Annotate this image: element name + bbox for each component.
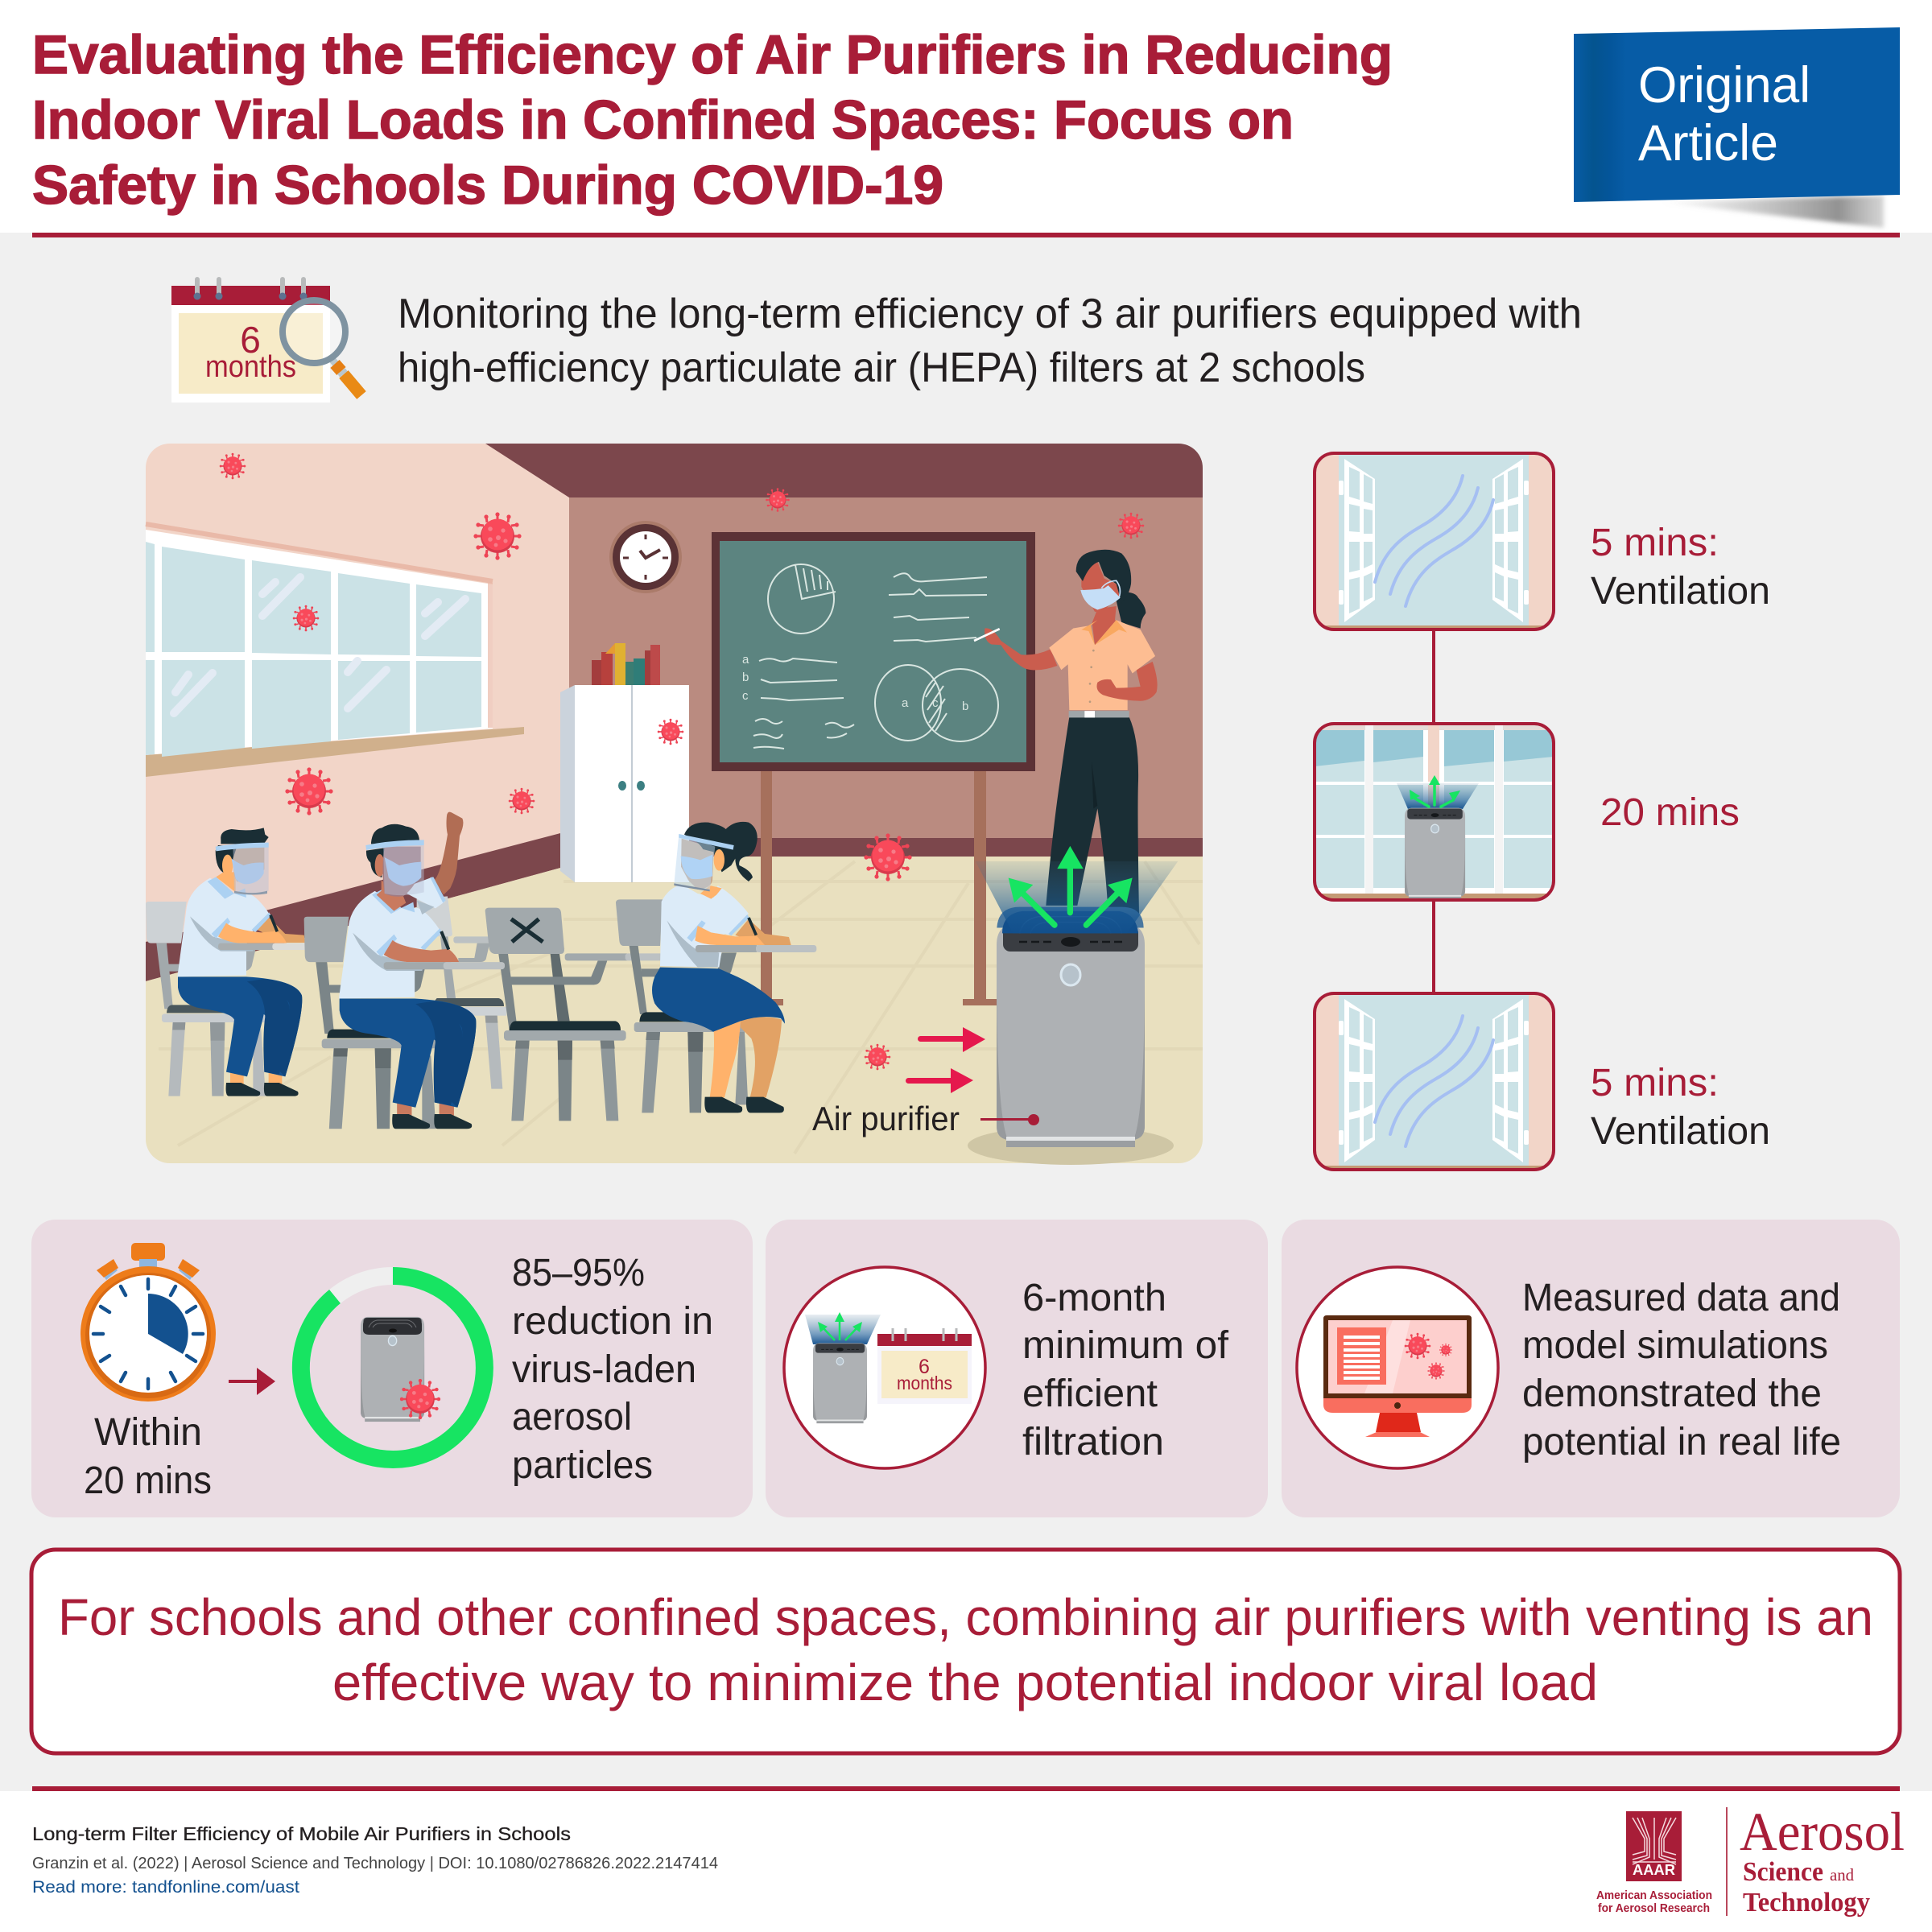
chalkboard: a <box>902 696 909 710</box>
simulations text: model simulations <box>1522 1324 1828 1367</box>
simulations text: demonstrated the <box>1522 1373 1822 1415</box>
calendar and magnifier icon: 6 <box>240 319 261 361</box>
footer band <box>0 1791 1932 1932</box>
within 20 mins text: Within <box>94 1411 202 1454</box>
logo: AAAR: American Association <box>1596 1889 1712 1902</box>
step 3 label: 5 mins: <box>1591 1062 1719 1104</box>
logo: Aerosol Science and Technology: Science <box>1743 1857 1823 1887</box>
logo: Aerosol Science and Technology: and <box>1830 1865 1854 1885</box>
simulations text: potential in real life <box>1522 1421 1841 1463</box>
clock <box>609 521 682 593</box>
reduction text: aerosol <box>512 1396 632 1439</box>
floor <box>146 857 1203 1163</box>
icon: stopwatch <box>80 1243 216 1402</box>
intro text <box>398 291 1582 391</box>
calendar and magnifier icon <box>171 279 361 402</box>
left wall <box>146 444 572 1023</box>
label: air purifier: Air purifier <box>812 1100 960 1137</box>
arrow <box>229 1368 275 1395</box>
reduction text: particles <box>512 1444 653 1487</box>
simulations text: Measured data and <box>1522 1277 1840 1319</box>
logo: AAAR <box>1596 1811 1712 1915</box>
logo: Aerosol Science and Technology: Technology <box>1743 1888 1870 1918</box>
student 2 with raised hand <box>304 812 505 1129</box>
reduction text <box>512 1252 713 1487</box>
step 2 label: 20 mins <box>1600 791 1740 834</box>
step 3 label: Ventilation <box>1591 1110 1770 1153</box>
filtration text: efficient <box>1022 1373 1158 1415</box>
filtration text <box>1022 1277 1229 1463</box>
badge: original article: Article <box>1638 115 1778 171</box>
back wall <box>569 497 1203 860</box>
student 3 in skirt <box>616 822 816 1113</box>
citation: Read more: tandfonline.com/uast <box>32 1878 299 1897</box>
empty chair <box>485 908 686 1121</box>
icon: purifier and calendar <box>784 1267 985 1468</box>
donut chart with purifier <box>301 1276 485 1459</box>
logo: AAAR: for Aerosol Research <box>1598 1901 1710 1915</box>
air purifier with airflow <box>968 846 1178 1165</box>
chalkboard: c <box>932 696 939 710</box>
badge: original article <box>1574 27 1900 228</box>
logo: Aerosol Science and Technology: Aerosol <box>1740 1801 1905 1862</box>
label: air purifier <box>812 1100 1039 1137</box>
title: Evaluating the Efficiency of Air Purifiers in Reducing <box>32 24 1393 85</box>
filtration text: filtration <box>1022 1421 1164 1463</box>
skirting <box>689 838 1203 857</box>
step 1 label: Ventilation <box>1591 570 1770 613</box>
back chair behind student 2 <box>417 896 506 1089</box>
intro text: high-efficiency particulate air (HEPA) filters at 2 schools <box>398 345 1365 391</box>
step 1 label: 5 mins: <box>1591 522 1719 564</box>
connector lines between window steps <box>1432 631 1435 992</box>
citation: Long-term Filter Efficiency of Mobile Air Purifiers in Schools <box>32 1823 571 1844</box>
header band <box>0 0 1932 233</box>
title: Safety in Schools During COVID-19 <box>32 155 943 216</box>
chalkboard <box>712 532 1035 1005</box>
panel: six month filtration <box>766 1220 1268 1517</box>
cabinet and books <box>560 643 689 882</box>
ceiling <box>485 444 1203 497</box>
icon: purifier and calendar: months <box>897 1373 952 1393</box>
within 20 mins text <box>84 1411 212 1502</box>
logo: Aerosol Science and Technology <box>1740 1801 1905 1918</box>
simulations text <box>1522 1277 1841 1463</box>
badge: original article: Original <box>1638 57 1810 114</box>
student 1 with chair <box>146 828 328 1096</box>
window <box>146 524 524 777</box>
title: Indoor Viral Loads in Confined Spaces: Focus on <box>32 89 1294 151</box>
icon: purifier and calendar: 6 <box>919 1356 930 1378</box>
viruses in the classroom <box>220 453 1144 1070</box>
panel: measured data and simulations <box>1282 1220 1900 1517</box>
step 2: closed window with purifier <box>1315 724 1554 900</box>
step 3: open window <box>1315 993 1554 1170</box>
panel: classroom illustration <box>146 444 1203 1165</box>
within 20 mins text: 20 mins <box>84 1459 212 1502</box>
step 1 label <box>1591 522 1770 613</box>
filtration text: minimum of <box>1022 1324 1229 1367</box>
teacher <box>974 550 1158 914</box>
title <box>32 24 1393 216</box>
intake arrows <box>906 1027 985 1093</box>
step 3 label <box>1591 1062 1770 1153</box>
citation <box>32 1823 718 1897</box>
citation: Granzin et al. (2022) | Aerosol Science and Technology | DOI: 10.1080/02786826.2022.2147414 <box>32 1855 718 1872</box>
icon: monitor <box>1297 1267 1498 1468</box>
calendar and magnifier icon: months <box>205 350 296 384</box>
panel: 85-95% reduction <box>31 1220 753 1517</box>
intro text: Monitoring the long-term efficiency of 3 air purifiers equipped with <box>398 291 1582 337</box>
conclusion box: For schools and other confined spaces, combining air purifiers with venting is an <box>58 1588 1873 1646</box>
logo: AAAR: AAAR <box>1633 1862 1675 1878</box>
reduction text: virus-laden <box>512 1348 696 1391</box>
reduction text: reduction in <box>512 1300 713 1343</box>
chalkboard: b <box>742 671 749 684</box>
step 1: open window <box>1315 453 1554 630</box>
conclusion box: effective way to minimize the potential indoor viral load <box>332 1653 1598 1711</box>
conclusion box <box>31 1550 1900 1753</box>
reduction text: 85–95% <box>512 1252 645 1294</box>
chalkboard: a <box>742 653 749 667</box>
filtration text: 6-month <box>1022 1277 1166 1319</box>
chalkboard: b <box>962 700 968 713</box>
chalkboard: c <box>742 689 749 703</box>
